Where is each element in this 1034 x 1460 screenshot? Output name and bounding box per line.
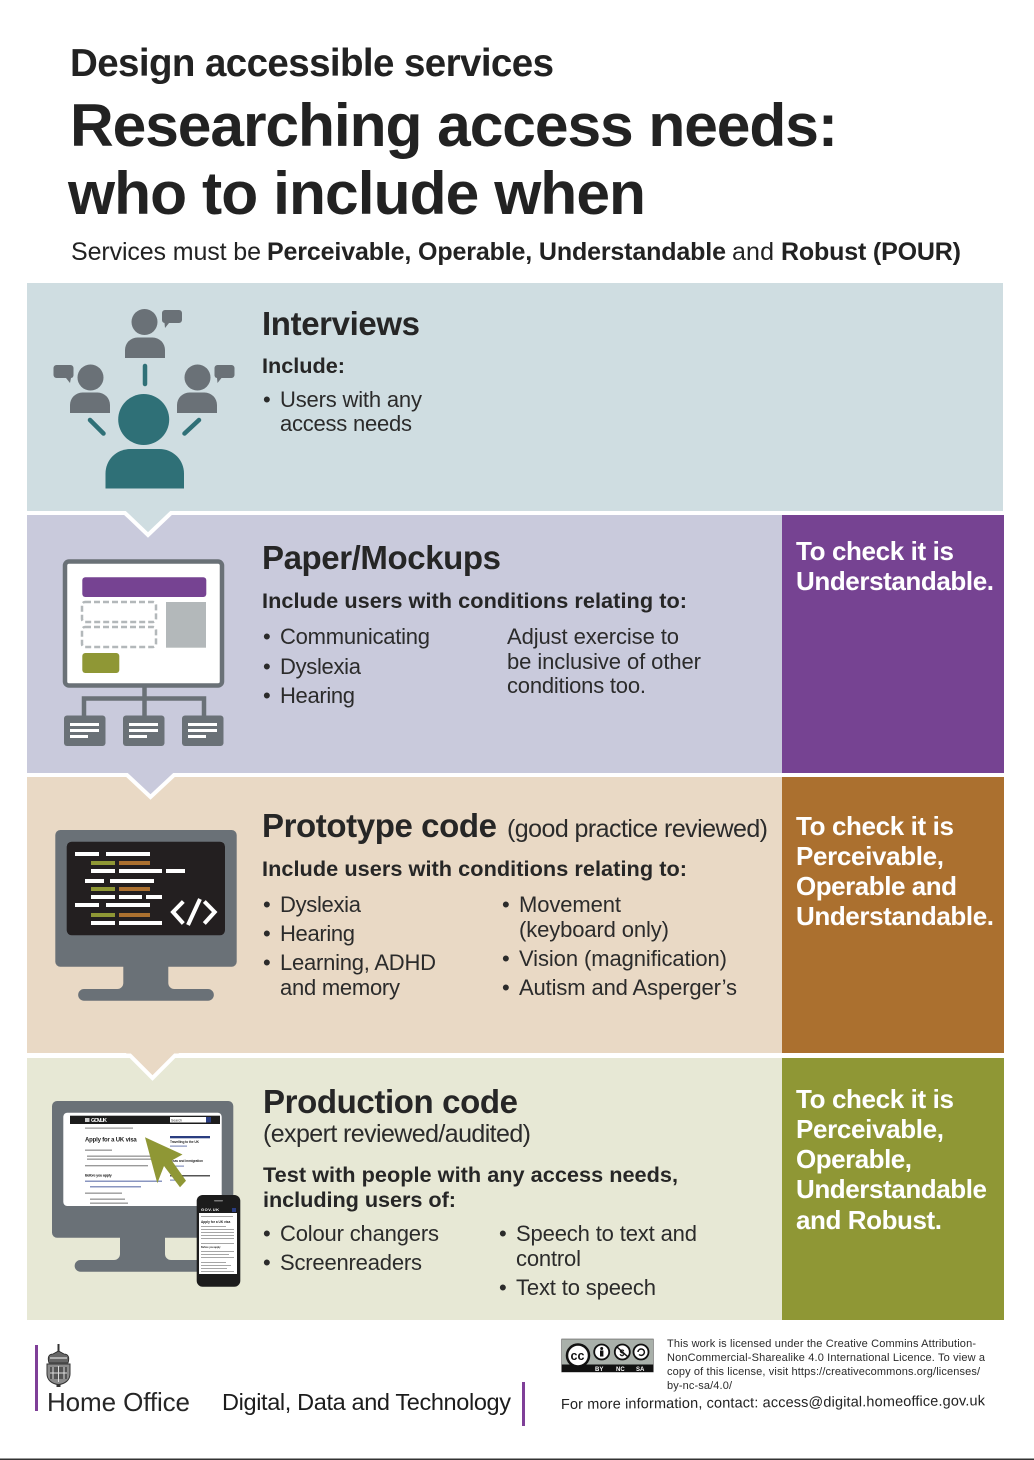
callout: all POUR: Understandable bbox=[796, 1174, 987, 1204]
note text: conditions too. bbox=[507, 673, 646, 698]
icon: paper wireframe on screen bbox=[64, 562, 224, 746]
POUR subtitle: Perceivable, Operable, Understandable bbox=[267, 238, 726, 266]
callout: understandable: To check it is bbox=[796, 536, 954, 566]
POUR subtitle bbox=[71, 238, 961, 266]
arrow: mockups to prototype bbox=[27, 773, 1004, 798]
header: page titles bbox=[67, 42, 961, 266]
icon: people interviewing bbox=[54, 309, 234, 488]
bullet list: • bbox=[263, 683, 271, 708]
icon: live service on desktop and phone: Apply for a UK visa bbox=[201, 1220, 230, 1224]
bullet list: access needs bbox=[280, 411, 412, 436]
POUR subtitle: Services must be bbox=[71, 238, 261, 266]
contact line: For more information, contact: access@digital.homeoffice.gov.uk bbox=[561, 1393, 986, 1413]
bullet list: • bbox=[263, 654, 271, 679]
icon: code monitor bbox=[55, 830, 237, 1001]
kicker heading: Design accessible services bbox=[70, 42, 554, 85]
badge: creative commons: cc bbox=[570, 1349, 584, 1363]
include label: Include users with conditions relating to: bbox=[262, 856, 687, 881]
badge: creative commons: $ bbox=[620, 1348, 625, 1358]
bullet list: Users with any bbox=[280, 387, 422, 412]
icon: live service on desktop and phone: Search bbox=[171, 1118, 182, 1122]
icon: live service on desktop and phone bbox=[52, 1101, 240, 1287]
bullet list right: • bbox=[502, 975, 510, 1000]
icon: live service on desktop and phone: GOV.UK bbox=[91, 1118, 107, 1124]
include label: Include: bbox=[262, 353, 345, 378]
bullet list bbox=[263, 387, 422, 436]
bullet list right: Speech to text and bbox=[516, 1221, 697, 1246]
bullet list right: • bbox=[502, 892, 510, 917]
bullet list right: • bbox=[499, 1275, 507, 1300]
bullet list: • bbox=[263, 624, 271, 649]
heading: Production code: Production code bbox=[263, 1083, 518, 1120]
note text: Adjust exercise to bbox=[507, 624, 679, 649]
panel: paper and mockups bbox=[27, 509, 1004, 773]
callout: perceivable operable understandable bbox=[782, 777, 1004, 1053]
label: Digital, Data and Technology bbox=[222, 1382, 525, 1426]
bullet list right: • bbox=[499, 1221, 507, 1246]
icon: live service on desktop and phone: GOV.UK bbox=[201, 1207, 219, 1212]
bullet list right: Text to speech bbox=[516, 1275, 656, 1300]
main title: who to include when bbox=[67, 159, 646, 227]
callout: all POUR: To check it is bbox=[796, 1084, 954, 1114]
bullet list left: Colour changers bbox=[280, 1221, 439, 1246]
main title bbox=[67, 91, 838, 227]
bullet list bbox=[263, 624, 430, 708]
licence text: This work is licensed under the Creative Commins Attribution- bbox=[667, 1338, 976, 1350]
callout: all POUR: and Robust. bbox=[796, 1205, 942, 1235]
POUR subtitle: Robust (POUR) bbox=[781, 238, 961, 266]
bullet list left: Learning, ADHD bbox=[280, 950, 436, 975]
test-with label: Test with people with any access needs, bbox=[263, 1162, 678, 1187]
icon: live service on desktop and phone: Before you apply bbox=[85, 1174, 113, 1178]
bullet list: Hearing bbox=[280, 683, 355, 708]
badge: creative commons bbox=[562, 1339, 653, 1373]
heading: Paper/Mockups: Paper/Mockups bbox=[262, 539, 501, 576]
licence text: NonCommercial-Sharealike 4.0 International Licence. To view a bbox=[667, 1352, 986, 1364]
test-with label: including users of: bbox=[263, 1187, 456, 1212]
bullet list left: Hearing bbox=[280, 921, 355, 946]
bullet list left: • bbox=[263, 921, 271, 946]
bullet list left: Dyslexia bbox=[280, 892, 362, 917]
bullet list left: Screenreaders bbox=[280, 1250, 422, 1275]
panel: prototype code bbox=[27, 773, 1004, 1053]
callout: all POUR: Operable, bbox=[796, 1144, 912, 1174]
bullet list right: control bbox=[516, 1246, 581, 1271]
heading note: (good practice reviewed) bbox=[507, 815, 768, 843]
callout: understandable: Understandable. bbox=[796, 566, 994, 596]
icon: live service on desktop and phone: Apply for a UK visa bbox=[85, 1138, 137, 1144]
bullet list left: and memory bbox=[280, 975, 400, 1000]
icon: live service on desktop and phone: Before you apply bbox=[201, 1246, 221, 1249]
footer: branding and licence bbox=[35, 1338, 986, 1426]
licence text: by-nc-sa/4.0/ bbox=[667, 1380, 733, 1392]
icon: live service on desktop and phone: Travelling to the UK bbox=[170, 1140, 200, 1144]
bullet list right: (keyboard only) bbox=[519, 917, 669, 942]
callout: perceivable operable understandable: Understandable. bbox=[796, 901, 994, 931]
test-with label bbox=[263, 1162, 678, 1212]
callout: all POUR: Perceivable, bbox=[796, 1114, 944, 1144]
heading: Interviews: Interviews bbox=[262, 305, 420, 342]
bullet list left: • bbox=[263, 892, 271, 917]
badge: creative commons: BY bbox=[595, 1367, 603, 1373]
bullet list: Dyslexia bbox=[280, 654, 362, 679]
badge: creative commons: SA bbox=[636, 1367, 645, 1373]
POUR subtitle: and bbox=[732, 238, 774, 266]
callout: perceivable operable understandable: Operable and bbox=[796, 871, 957, 901]
arrow: prototype to production bbox=[27, 1053, 1004, 1078]
bullet list right bbox=[502, 892, 737, 1000]
licence text: copy of this license, visit https://creativecommons.org/licenses/ bbox=[667, 1366, 981, 1378]
label: Digital, Data and Technology: Digital, Data and Technology bbox=[222, 1389, 511, 1415]
icon: live service on desktop and phone: Visas and immigration bbox=[170, 1159, 203, 1163]
include label: Include users with conditions relating to: bbox=[262, 588, 687, 613]
callout: perceivable operable understandable: To check it is bbox=[796, 811, 954, 841]
arrow: interviews to mockups bbox=[27, 509, 1004, 535]
licence text bbox=[667, 1338, 986, 1392]
bullet list: • bbox=[263, 387, 271, 412]
bullet list right: Vision (magnification) bbox=[519, 946, 727, 971]
heading: Prototype code: Prototype code bbox=[262, 807, 497, 844]
bullet list right: Autism and Asperger’s bbox=[519, 975, 737, 1000]
logo: Home Office: Home Office bbox=[47, 1387, 190, 1417]
callout: perceivable operable understandable: Perceivable, bbox=[796, 841, 944, 871]
bullet list left bbox=[263, 1221, 439, 1275]
bullet list: Communicating bbox=[280, 624, 430, 649]
logo: Home Office bbox=[35, 1344, 190, 1417]
callout: all POUR bbox=[782, 1058, 1004, 1320]
bullet list right: Movement bbox=[519, 892, 621, 917]
bullet list left: • bbox=[263, 1250, 271, 1275]
callout: understandable bbox=[782, 515, 1004, 773]
bullet list right bbox=[499, 1221, 697, 1300]
bullet list right: • bbox=[502, 946, 510, 971]
bullet list left: • bbox=[263, 1221, 271, 1246]
bullet list left: • bbox=[263, 950, 271, 975]
note text bbox=[507, 624, 701, 698]
panel: interviews bbox=[27, 283, 1003, 511]
note text: be inclusive of other bbox=[507, 649, 701, 674]
panel: production code bbox=[27, 1053, 1004, 1320]
badge: creative commons: NC bbox=[616, 1367, 625, 1373]
bullet list left bbox=[263, 892, 436, 1000]
heading note: (expert reviewed/audited) bbox=[263, 1120, 531, 1148]
main title: Researching access needs: bbox=[70, 91, 838, 159]
